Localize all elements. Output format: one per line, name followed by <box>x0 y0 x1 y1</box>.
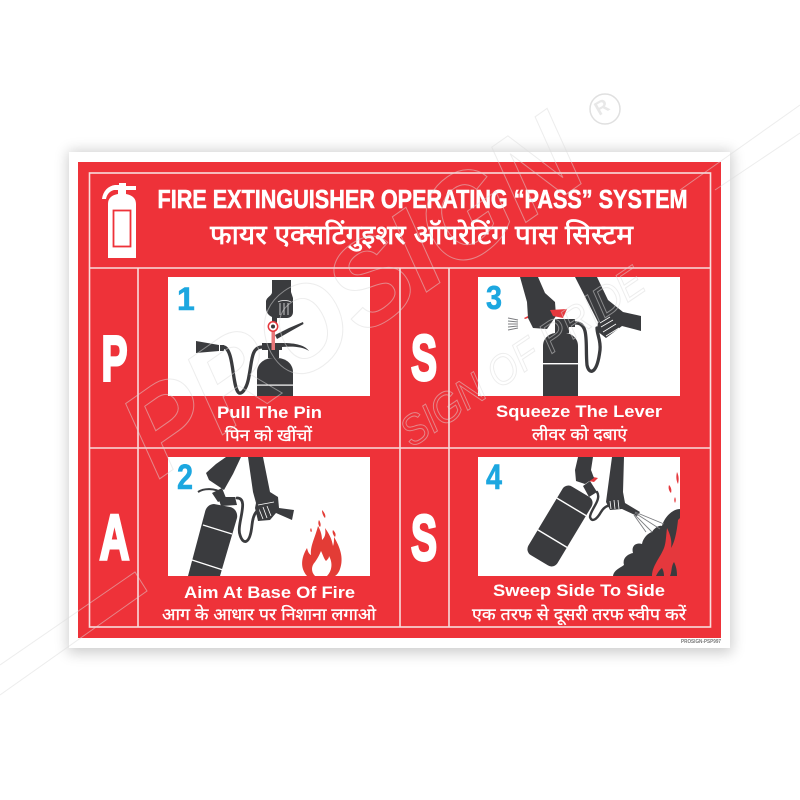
panel 3: squeeze the lever <box>478 277 680 396</box>
step number 3: 3 <box>486 279 502 316</box>
smoke cloud <box>613 509 680 576</box>
letter A: A <box>100 502 130 574</box>
hand holding nozzle <box>248 457 294 521</box>
caption Hindi: pull the pin: पिन को खींचों <box>225 425 313 445</box>
caption: pull the pin: Pull The Pin <box>217 403 322 422</box>
hand on lever <box>206 457 241 490</box>
letter P: P <box>102 322 128 394</box>
extinguisher body <box>543 319 578 396</box>
left hand <box>575 457 594 484</box>
hose <box>590 492 610 520</box>
sign board <box>68 151 732 653</box>
spray <box>508 318 518 330</box>
extinguisher body <box>188 488 237 576</box>
extinguisher body <box>527 486 593 566</box>
frame grid <box>89 173 711 627</box>
letter S: S <box>411 502 437 574</box>
caption: aim at base of fire: Aim At Base Of Fire <box>184 583 355 602</box>
extinguisher head and pin <box>262 322 309 358</box>
extinguisher body <box>257 358 293 396</box>
step number 1: 1 <box>177 281 195 317</box>
panel 4: sweep side to side <box>478 457 680 576</box>
lever <box>550 309 567 318</box>
product code: PROSIGN-PSP997 <box>681 639 721 645</box>
panel 1: pull the pin <box>168 277 370 396</box>
right hand holding nozzle <box>575 277 641 338</box>
watermark: SIGN OF PRIDE <box>391 257 654 455</box>
caption: squeeze the lever: Squeeze The Lever <box>496 402 662 421</box>
title: FIRE EXTINGUISHER OPERATING “PASS” SYSTEM <box>158 186 688 214</box>
hose and nozzle <box>196 341 262 393</box>
icon: fire extinguisher <box>102 183 136 258</box>
step number 2: 2 <box>177 458 193 497</box>
red discharge droplets <box>524 316 528 319</box>
left hand squeezing <box>520 277 556 329</box>
icon: flame <box>302 510 342 576</box>
hose <box>237 498 258 542</box>
caption Hindi: sweep side to side: एक तरफ से दूसरी तरफ स्वीप करें <box>472 603 687 625</box>
title in Hindi: फायर एक्सटिंगुइशर ऑपरेटिंग पास सिस्टम <box>210 219 634 252</box>
hose <box>575 323 600 371</box>
step number 4: 4 <box>486 458 502 497</box>
hand pulling pin <box>266 280 293 324</box>
lever <box>589 477 598 482</box>
panel 2: aim at base of fire <box>168 457 370 576</box>
letter S: S <box>411 322 437 394</box>
watermark: R <box>591 95 614 120</box>
caption Hindi: squeeze the lever: लीवर को दबाएं <box>532 424 628 444</box>
spray <box>634 512 664 532</box>
caption Hindi: aim at base of fire: आग के आधार पर निशाना लगाओ <box>162 603 377 624</box>
watermark <box>0 88 800 695</box>
extinguisher valve <box>583 481 597 497</box>
watermark: PROSIGN <box>97 88 609 501</box>
caption: sweep side to side: Sweep Side To Side <box>493 581 665 600</box>
right hand with nozzle <box>606 457 640 516</box>
flames <box>652 472 680 576</box>
